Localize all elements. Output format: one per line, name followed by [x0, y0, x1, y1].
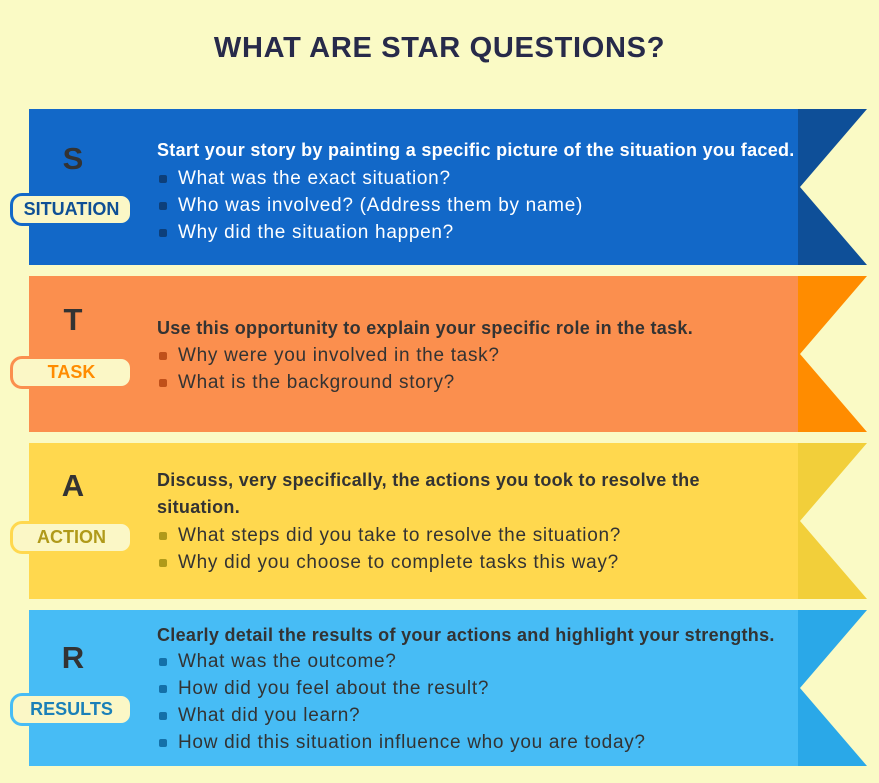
text: action: situation. — [157, 497, 240, 517]
text: action: What steps did you take to resolve the situation? — [178, 525, 621, 546]
title: WHAT ARE STAR QUESTIONS? — [214, 32, 665, 64]
label: action: ACTION — [37, 527, 106, 547]
letter A: A — [62, 468, 84, 503]
label: results — [10, 693, 133, 726]
panel: action — [29, 443, 798, 599]
letter S: S — [63, 141, 83, 176]
label: situation: SITUATION — [24, 199, 119, 219]
text: results: Clearly detail the results of your actions and highlight your strengths. — [157, 625, 775, 645]
text: action: Why did you choose to complete tasks this way? — [178, 552, 619, 573]
text: task — [157, 318, 693, 393]
text: action — [157, 470, 700, 573]
panel: results — [29, 610, 798, 766]
label: task: TASK — [48, 362, 95, 382]
text: action: Discuss, very specifically, the actions you took to resolve the — [157, 470, 700, 490]
text: results — [157, 625, 775, 753]
label: results: RESULTS — [30, 699, 113, 719]
letter T: T — [64, 302, 82, 337]
text: situation: What was the exact situation? — [178, 168, 451, 189]
ribbon: task — [798, 276, 867, 432]
label: task — [10, 356, 133, 389]
text: situation: Why did the situation happen? — [178, 222, 454, 243]
text: results: How did this situation influence who you are today? — [178, 732, 646, 753]
letter R: R — [62, 640, 84, 675]
text: situation — [157, 140, 795, 243]
ribbon: action — [798, 443, 867, 599]
text: task: What is the background story? — [178, 372, 455, 393]
text: task: Use this opportunity to explain your specific role in the task. — [157, 318, 693, 338]
panel: situation — [29, 109, 798, 265]
label: action — [10, 521, 133, 554]
text: results: What was the outcome? — [178, 651, 397, 672]
label: situation — [10, 193, 133, 226]
text: results: How did you feel about the result? — [178, 678, 489, 699]
panel: task — [29, 276, 798, 432]
ribbon: situation — [798, 109, 867, 265]
text: situation: Start your story by painting a specific picture of the situation you faced. — [157, 140, 795, 160]
text: task: Why were you involved in the task? — [178, 345, 500, 366]
ribbon: results — [798, 610, 867, 766]
text: results: What did you learn? — [178, 705, 360, 726]
text: situation: Who was involved? (Address them by name) — [178, 195, 583, 216]
